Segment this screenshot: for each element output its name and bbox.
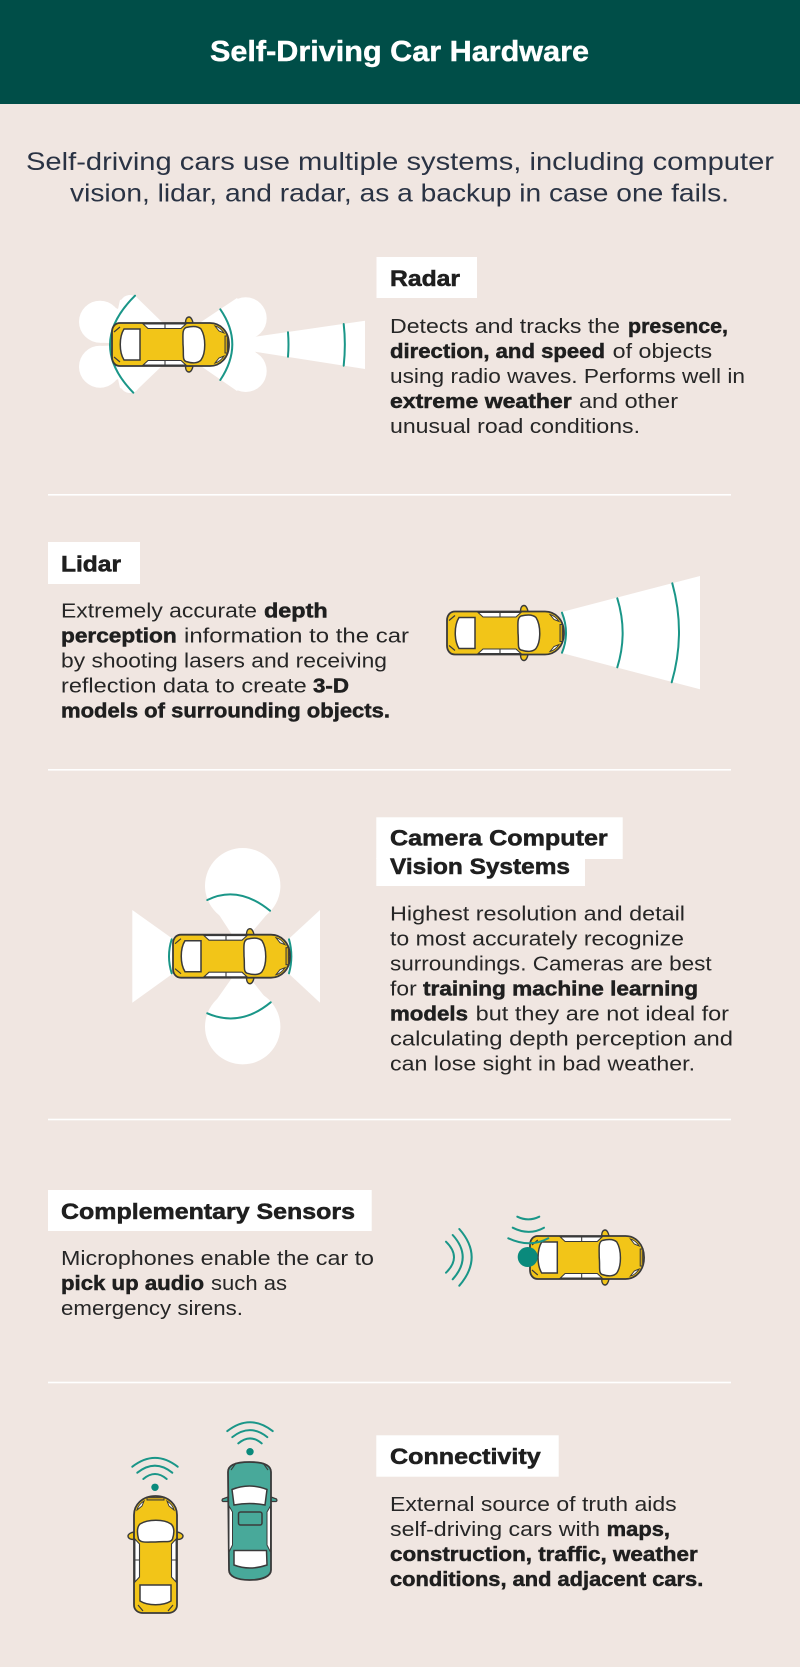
- radar signal arcs: [110, 296, 345, 393]
- camera description: training machine learning: [423, 978, 698, 1001]
- intro text: [26, 148, 774, 208]
- radar description: direction, and speed: [390, 340, 605, 363]
- sound waves from above: [508, 1217, 548, 1243]
- radar description: and other: [579, 390, 678, 413]
- radar description: Detects and tracks the: [390, 315, 620, 338]
- lidar signal arcs: [562, 583, 679, 682]
- icon: yellow car: [112, 317, 229, 372]
- connectivity heading: [376, 1435, 559, 1477]
- panel: connectivity: [128, 1422, 703, 1613]
- camera coverage zones: [132, 848, 320, 1064]
- lidar coverage cone: [563, 576, 700, 689]
- microphone dot: [518, 1247, 538, 1267]
- camera description: calculating depth perception and: [390, 1028, 733, 1051]
- sound waves from left: [446, 1229, 472, 1286]
- connectivity heading: Connectivity: [390, 1444, 541, 1469]
- lidar description: by shooting lasers and receiving: [61, 650, 387, 672]
- connectivity illustration: [128, 1422, 277, 1613]
- camera description: can lose sight in bad weather.: [390, 1053, 695, 1076]
- intro text: Self-driving cars use multiple systems, including computer: [26, 148, 774, 176]
- radar description: using radio waves. Performs well in: [390, 365, 745, 388]
- lidar description: information to the car: [184, 624, 409, 648]
- camera illustration: [132, 848, 320, 1064]
- lidar illustration: [447, 576, 700, 689]
- radar description: of objects: [613, 340, 712, 363]
- wifi signal: yellow car: [132, 1458, 178, 1491]
- lidar description: reflection data to create: [61, 674, 307, 698]
- panel: lidar: [48, 542, 700, 722]
- radar description: extreme weather: [390, 390, 572, 413]
- sensors description: Microphones enable the car to: [61, 1247, 374, 1270]
- camera description: models: [390, 1003, 468, 1026]
- sensors heading: Complementary Sensors: [61, 1199, 355, 1224]
- icon: yellow car, front up: [128, 1496, 183, 1613]
- lidar description: Extremely accurate: [61, 600, 257, 622]
- lidar heading: [48, 542, 140, 584]
- radar description: [390, 315, 745, 438]
- connectivity description: [390, 1493, 703, 1591]
- intro text: vision, lidar, and radar, as a backup in case one fails.: [70, 180, 729, 208]
- wifi signal: teal car: [227, 1422, 273, 1455]
- sensors description: such as: [211, 1272, 287, 1295]
- radar description: unusual road conditions.: [390, 415, 640, 438]
- camera description: but they are not ideal for: [476, 1003, 729, 1026]
- connectivity description: self-driving cars with: [390, 1518, 600, 1541]
- header banner: [0, 0, 800, 104]
- panel: camera computer vision: [132, 817, 733, 1076]
- lidar description: perception: [61, 624, 177, 648]
- panel: complementary sensors: [48, 1190, 644, 1320]
- camera heading: Camera Computer: [390, 826, 608, 851]
- camera heading: [376, 817, 623, 886]
- camera description: surroundings. Cameras are best: [390, 953, 712, 976]
- camera description: for: [390, 978, 417, 1001]
- icon: yellow car: [530, 1230, 644, 1285]
- title: Self-Driving Car Hardware: [210, 36, 589, 68]
- radar heading: Radar: [390, 266, 460, 291]
- icon: yellow car: [447, 606, 564, 660]
- panel: radar: [79, 257, 745, 438]
- radar coverage zones: [79, 295, 365, 393]
- connectivity description: External source of truth aids: [390, 1493, 677, 1516]
- connectivity description: conditions, and adjacent cars.: [390, 1568, 703, 1591]
- lidar heading: Lidar: [61, 552, 121, 576]
- lidar description: [61, 600, 409, 722]
- camera description: to most accurately recognize: [390, 928, 684, 951]
- camera description: Highest resolution and detail: [390, 903, 685, 926]
- radar illustration: [79, 295, 365, 393]
- sensors description: pick up audio: [61, 1272, 204, 1295]
- radar heading: [376, 257, 477, 298]
- camera signal arcs: [169, 894, 291, 1018]
- camera heading: Vision Systems: [390, 854, 570, 879]
- radar description: presence,: [628, 315, 728, 338]
- icon: yellow car: [173, 929, 290, 984]
- icon: teal car: [222, 1462, 277, 1580]
- camera description: [390, 903, 733, 1076]
- sensors description: emergency sirens.: [61, 1297, 243, 1320]
- lidar description: depth: [264, 600, 328, 622]
- sensors illustration: [446, 1217, 644, 1286]
- lidar description: models of surrounding objects.: [61, 700, 390, 722]
- sensors heading: [48, 1190, 372, 1231]
- sensors description: [61, 1247, 374, 1320]
- lidar description: 3-D: [313, 674, 349, 698]
- connectivity description: construction, traffic, weather: [390, 1543, 698, 1566]
- connectivity description: maps,: [607, 1518, 670, 1541]
